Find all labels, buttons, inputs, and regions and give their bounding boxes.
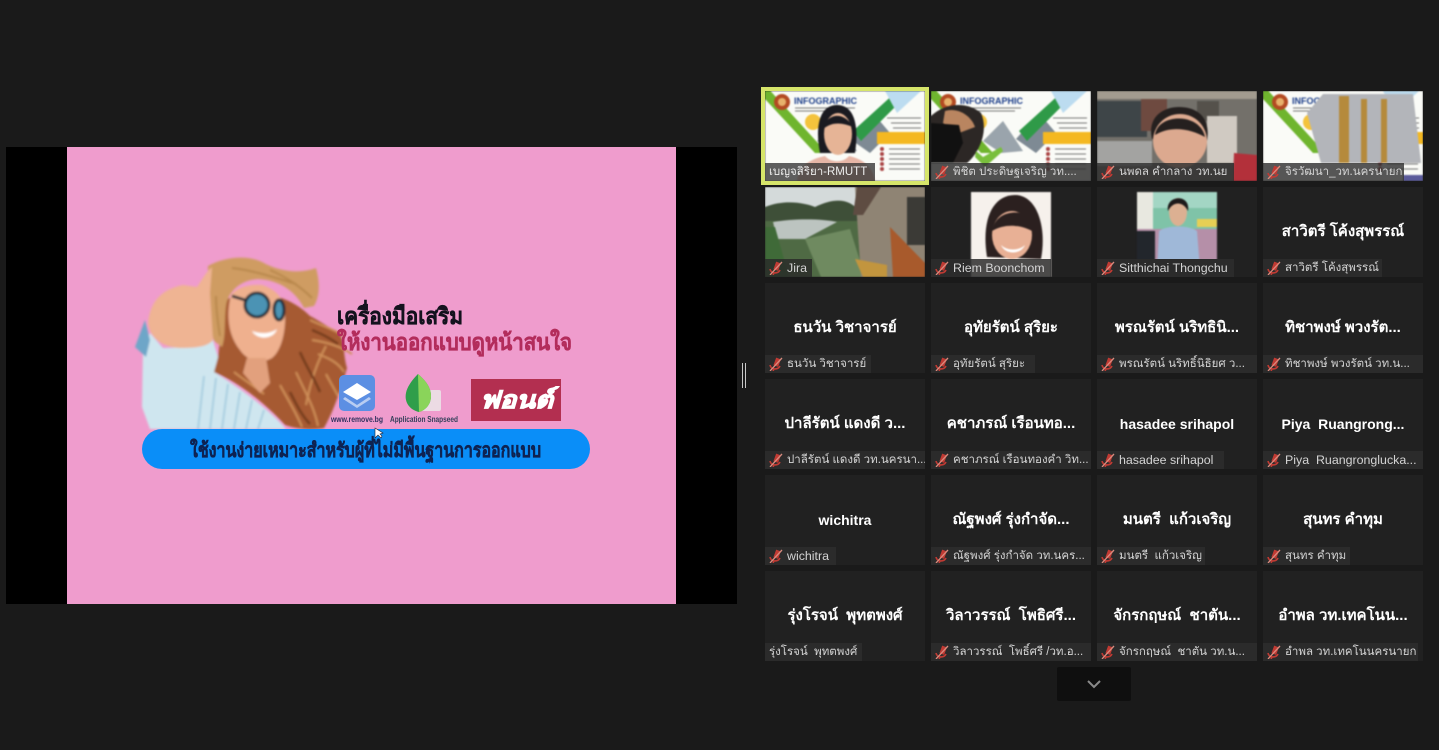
tile: ธนวัน วิชาจารย์: ธนวัน วิชาจารย์ [793,319,897,336]
name label: ณัฐพงศ์ รุ่งกำจัด วท.นคร... [953,550,1085,562]
tile: รุ่งโรจน์ พุทตพงศ์: รุ่งโรจน์ พุทตพงศ์ [787,607,903,624]
active speaker highlight [761,87,929,185]
name label: นพดล คำกลาง วท.นย [1119,166,1227,178]
name label: วิลาวรรณ์ โพธิ์ศรี /วท.อ... [953,646,1083,658]
name label [931,355,1035,373]
tile: Jira [765,187,925,277]
name label [931,163,1091,181]
tile: พรณรัตน์ นริทธินิ: พรณรัตน์ นริทธินิ... [1115,319,1239,336]
shared screen: presentation slide [6,147,737,604]
tile: พิชิต [931,91,1091,181]
name label: ธนวัน วิชาจารย์ [787,358,866,370]
tile: พรณรัตน์ นริทธินิ [1097,283,1257,373]
name label [1263,643,1418,661]
name label [1097,547,1205,565]
tile: ณัฐพงศ์ รุ่งกำจัด: ณัฐพงศ์ รุ่งกำจัด... [952,511,1070,528]
tile: wichitra [765,475,925,565]
name label [765,259,812,277]
tile: ปาลีรัตน์ แดงดี [765,379,925,469]
tile: ณัฐพงศ์ รุ่งกำจัด [931,475,1091,565]
name label: จิรวัฒนา_วท.นครนายก [1285,166,1402,178]
icon: Snapseed: Application Snapseed [390,415,458,424]
name label [765,163,875,181]
name label [1097,259,1234,277]
name label [1263,355,1423,373]
next page chevron button [1057,667,1131,701]
tile: นพดล [1097,91,1257,181]
tile: ทิชาพงษ์ พวงรัต: ทิชาพงษ์ พวงรัต... [1285,319,1401,336]
blue banner: ใช้งานง่ายเหมาะสำหรับผู้ที่ไม่มีพื้นฐานการออกแบบ [190,435,541,464]
name label [1097,643,1257,661]
slide heading: เครื่องมือเสริม [337,299,463,329]
name label [1097,163,1234,181]
tile: อุทัยรัตน์ สุริยะ: อุทัยรัตน์ สุริยะ [964,319,1058,336]
tile: มนตรี แก้วเจริญ: มนตรี แก้วเจริญ [1123,511,1231,528]
name label [1097,355,1257,373]
name label: สาวิตรี โค้งสุพรรณ์ [1285,262,1379,274]
name label [1263,163,1404,181]
name label: อำพล วท.เทคโนนครนายก [1285,646,1416,658]
tile: Riem Boonchom [931,187,1091,277]
name label: hasadee srihapol [1119,453,1213,467]
tile: จิรวัฒนา [1263,91,1423,181]
tile: Piya Ruangrong: Piya Ruangrong... [1282,416,1404,432]
name label [931,451,1091,469]
name label [931,643,1091,661]
tile: สุนทร คำทุม [1263,475,1423,565]
name label [1097,451,1224,469]
name label [765,355,871,373]
tile: มนตรี แก้วเจริญ [1097,475,1257,565]
tile: สาวิตรี โค้งสุพรรณ์ [1263,187,1423,277]
name label [1263,451,1423,469]
name label: wichitra [787,549,829,563]
icon: remove.bg: www.remove.bg [330,415,383,424]
tile: wichitra: wichitra [819,512,871,528]
name label: Jira [787,261,807,275]
logo: font site: ฟอนต์ [480,386,560,414]
tile: จักรกฤษณ์ ชาตัน [1097,571,1257,661]
photo: woman in straw hat [135,258,352,429]
icon: remove.bg [330,375,383,424]
tile: อุทัยรัตน์ สุริยะ [931,283,1091,373]
tile: สุนทร คำทุม: สุนทร คำทุม [1303,511,1383,528]
tile: Piya Ruangrong [1263,379,1423,469]
tile: ทิชาพงษ์ พวงรัต [1263,283,1423,373]
name label [1263,547,1350,565]
icon: Snapseed [390,374,458,424]
name label: ทิชาพงษ์ พวงรัตน์ วท.น... [1285,358,1410,370]
name label: มนตรี แก้วเจริญ [1119,550,1202,562]
tile: ธนวัน วิชาจารย์ [765,283,925,373]
tile: จักรกฤษณ์ ชาตัน: จักรกฤษณ์ ชาตัน... [1113,607,1241,624]
name label: จักรกฤษณ์ ชาตัน วท.น... [1119,646,1245,658]
name label: อุทัยรัตน์ สุริยะ [953,358,1025,370]
tile: รุ่งโรจน์ พุทตพงศ์ [765,571,925,661]
name label [765,451,925,469]
panel divider handle [742,363,746,388]
tile: วิลาวรรณ์ โพธิ์ศรี: วิลาวรรณ์ โพธิศรี... [946,607,1076,624]
name label: คชาภรณ์ เรือนทองคำ วิท... [953,454,1089,466]
tile: คชาภรณ์ เรือนทอ [931,379,1091,469]
name label: Piya Ruangronglucka... [1285,453,1417,467]
name label: พรณรัตน์ นริทธิ์นิธิยศ ว... [1119,358,1245,370]
blue banner [142,429,590,469]
mouse pointer [375,428,383,438]
tile: อำพล วท.เทคโนน [1263,571,1423,661]
tile: Sitthichai Thongchu [1097,187,1257,277]
name label [1263,259,1382,277]
name label [765,643,862,661]
name label: รุ่งโรจน์ พุทตพงศ์ [769,646,857,658]
slide subheading: ให้งานออกแบบดูหน้าสนใจ [337,328,572,357]
name label [931,547,1091,565]
name label: เบญจสิริยา-RMUTT [769,166,867,178]
name label: ปาลีรัตน์ แดงดี วท.นครนา... [787,454,925,466]
name label: สุนทร คำทุม [1285,550,1346,562]
name label [765,547,836,565]
name label: Sitthichai Thongchu [1119,261,1228,275]
tile: อำพล วท.เทคโนน: อำพล วท.เทคโนน... [1278,607,1408,624]
logo: font site [471,379,561,421]
tile: ปาลีรัตน์ แดงดี: ปาลีรัตน์ แดงดี ว... [785,415,905,432]
tile: hasadee srihapol: hasadee srihapol [1120,416,1234,432]
tile: คชาภรณ์ เรือนทอ: คชาภรณ์ เรือนทอ... [947,415,1075,432]
name label [931,259,1051,277]
name label: พิชิต ประดิษฐเจริญ วท.... [953,166,1077,178]
tile: speaker เบญจสิริยา-RMUTT [765,91,925,181]
tile: วิลาวรรณ์ โพธิ์ศรี [931,571,1091,661]
tile: สาวิตรี โค้งสุพรรณ์: สาวิตรี โค้งสุพรรณ์ [1282,223,1404,240]
tile: hasadee srihapol [1097,379,1257,469]
name label: Riem Boonchom [953,261,1045,275]
